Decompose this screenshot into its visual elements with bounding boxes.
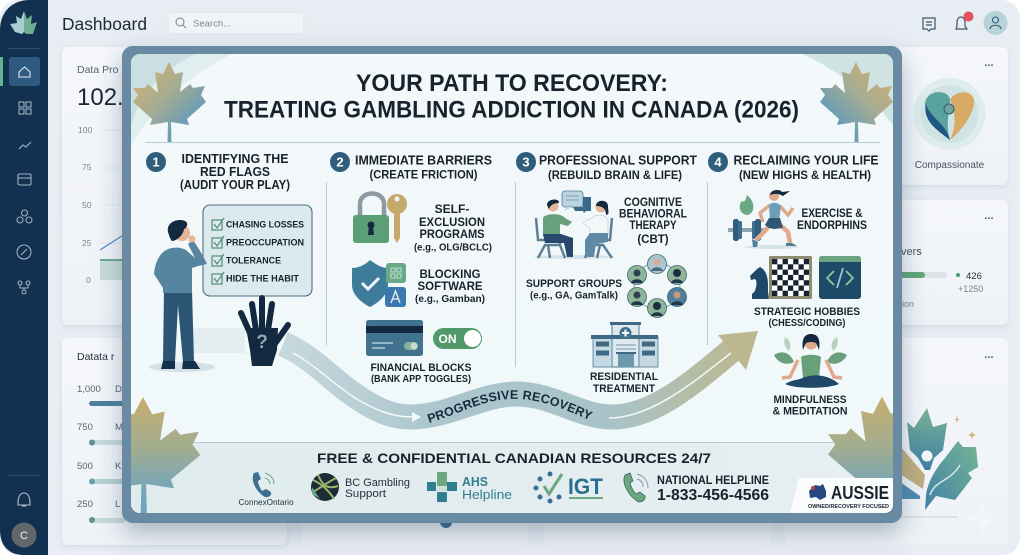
icon: Australia flag map (809, 484, 826, 500)
logo: BC Gambling Support: Support (345, 488, 386, 500)
text: cognitive behavioral therapy (619, 197, 687, 246)
decorative corners (131, 54, 893, 145)
card: compassionate: ... (984, 57, 994, 69)
text: exercise and endorphins: EXERCISE & (802, 208, 862, 220)
card: compassionate (780, 47, 1008, 185)
line under title (145, 142, 880, 143)
checklist panel: TOLERANCE (226, 256, 281, 266)
icon: chess knight (750, 267, 769, 299)
text: blocking software: BLOCKING (420, 267, 480, 281)
card: data rows: 500 (77, 461, 93, 472)
heading 4: (NEW HIGHS & HEALTH) (739, 168, 871, 182)
icon: message (923, 18, 935, 31)
text: self-exclusion programs: SELF- (435, 202, 469, 216)
badge: Aussie owned (790, 478, 893, 513)
step number 1 (146, 152, 166, 172)
text: exercise and endorphins: ENDORPHINS (797, 220, 867, 232)
card: data progress: 102. (77, 84, 124, 111)
text: cognitive behavioral therapy: THERAPY (630, 220, 677, 232)
icon: code window (819, 256, 861, 299)
heading 1: (AUDIT YOUR PLAY) (180, 178, 290, 192)
icon: chess board (769, 256, 812, 299)
text: mindfulness and meditation: & MEDITATION (772, 406, 848, 418)
icon: dark hand with question mark: ? (256, 332, 268, 353)
icon: flame (740, 195, 753, 215)
panel: step 3 professional support (516, 152, 697, 395)
illustration: therapy session (534, 191, 614, 259)
heading 1: IDENTIFYING THE (182, 152, 288, 166)
heading 3 (539, 154, 697, 182)
badge: Aussie owned: OWNED/RECOVERY FOCUSED (808, 504, 889, 510)
icon: dark hand with question mark (241, 298, 288, 366)
text: financial blocks: FINANCIAL BLOCKS (370, 362, 472, 374)
step number 2: 2 (336, 154, 344, 170)
heading 4: RECLAIMING YOUR LIFE (734, 154, 878, 168)
icon: bank card (366, 320, 423, 356)
icon: sidebar bell (18, 493, 30, 506)
heading 1 (180, 152, 290, 192)
sidebar (0, 0, 48, 555)
card: data rows: 750 (77, 422, 93, 433)
icon: notification bell (956, 12, 974, 29)
heading 4 (734, 154, 878, 182)
bottom dashboard cards: ... (984, 349, 994, 361)
text: cognitive behavioral therapy: BEHAVIORAL (619, 208, 687, 220)
logo: IGT (534, 472, 604, 504)
card: drivers: ion (902, 299, 914, 309)
text: support groups (526, 278, 622, 302)
text: self-exclusion programs: PROGRAMS (420, 227, 484, 241)
panel: step 2 immediate barriers (330, 152, 492, 385)
card: data rows: Datata r (77, 351, 115, 363)
heading 3: PROFESSIONAL SUPPORT (539, 154, 697, 168)
dashboard header (62, 11, 1008, 35)
step number 1: 1 (152, 154, 160, 170)
card: drivers (780, 200, 1008, 325)
text: strategic hobbies: (CHESS/CODING) (768, 318, 846, 329)
card: data rows (62, 338, 287, 545)
card: data progress: 0 (86, 275, 91, 285)
heading 1: RED FLAGS (200, 165, 270, 179)
heading 2: (CREATE FRICTION) (370, 168, 478, 182)
text: support groups: (e.g., GA, GamTalk) (530, 290, 618, 302)
card: drivers: +1250 (958, 284, 983, 294)
card: data rows: K (115, 461, 122, 472)
logo: national helpline (624, 473, 769, 504)
icon: user avatar (984, 11, 1008, 35)
card: data progress: Data Pro (77, 64, 119, 76)
card: data rows: 1,000 (77, 384, 101, 395)
ribbon label: PROGRESSIVE RECOVERY (427, 390, 593, 423)
text: residential treatment (590, 371, 658, 395)
icon: support group circle (628, 254, 686, 318)
logo: AHS Helpline: AHS (462, 475, 488, 489)
bottom dashboard cards (302, 338, 1008, 545)
leaf: bottom left (131, 397, 200, 513)
user initial avatar (12, 522, 36, 548)
leaf: top right (820, 62, 893, 142)
card: drivers: 426 (966, 271, 982, 282)
step number 3: 3 (522, 154, 530, 170)
logo: IGT: IGT (568, 474, 604, 499)
text: mindfulness and meditation: MINDFULNESS (774, 394, 846, 406)
text: blocking software: SOFTWARE (418, 279, 482, 293)
card: data rows: M (115, 422, 123, 433)
card: data rows: 250 (77, 499, 93, 510)
text: strategic hobbies: STRATEGIC HOBBIES (754, 306, 860, 318)
title: TREATING GAMBLING ADDICTION IN CANADA (2026) (224, 96, 799, 124)
step number 3 (516, 152, 536, 172)
card: drivers: vers (901, 246, 922, 258)
illustration: meditating person (774, 334, 847, 388)
icon: dumbbell (728, 219, 764, 241)
text: financial blocks (370, 362, 472, 385)
active nav item: home (0, 57, 40, 86)
search box (168, 12, 304, 34)
badge: Aussie owned: AUSSIE (831, 483, 889, 503)
icon: ON toggle (433, 328, 482, 349)
step number 4: 4 (714, 154, 722, 170)
text: self-exclusion programs: EXCLUSION (419, 215, 485, 229)
illustration: runner (745, 190, 799, 249)
text: mindfulness and meditation (772, 394, 848, 418)
card: data progress (62, 47, 392, 325)
checklist panel: HIDE THE HABIT (226, 274, 299, 284)
card: data progress: 100 (78, 125, 92, 135)
user initial avatar: C (20, 530, 28, 542)
footer heading: FREE & CONFIDENTIAL CANADIAN RESOURCES 24/7 (317, 450, 711, 466)
card: data rows: L (115, 499, 120, 510)
icon: dashboard leaf figure (900, 408, 999, 535)
checklist panel (203, 205, 312, 296)
icon: padlock and key (353, 194, 407, 243)
heading: Dashboard: Dashboard (62, 14, 147, 34)
text: cognitive behavioral therapy: (CBT) (637, 234, 669, 246)
light band behind figure (191, 328, 245, 353)
leaf: bottom right (828, 396, 893, 478)
text: financial blocks: (BANK APP TOGGLES) (371, 374, 471, 385)
card: data progress: 25 (82, 238, 92, 248)
divider 3-4 (707, 182, 708, 345)
checklist panel: CHASING LOSSES (226, 220, 304, 230)
icon: hospital (591, 322, 658, 367)
heading 3: (REBUILD BRAIN & LIFE) (548, 168, 682, 182)
text: exercise and endorphins (797, 208, 867, 232)
text: self-exclusion programs: (e.g., OLG/BCLC) (414, 242, 492, 254)
logo: AHS Helpline: Helpline (462, 487, 512, 502)
illustration: thinking person (149, 220, 215, 372)
text: blocking software (415, 267, 485, 305)
logo: maple leaf (10, 11, 37, 34)
icon: shield and apps (352, 260, 406, 307)
title: YOUR PATH TO RECOVERY: (356, 70, 668, 97)
footer band: resources (131, 396, 893, 513)
step number 4 (708, 152, 728, 172)
text: cognitive behavioral therapy: COGNITIVE (624, 197, 682, 209)
icon: ON toggle: ON (438, 332, 456, 346)
text: residential treatment: TREATMENT (593, 383, 655, 395)
logo: AHS Helpline (427, 472, 512, 502)
text: support groups: SUPPORT GROUPS (526, 278, 622, 290)
card: data progress: 75 (82, 162, 92, 172)
leaf: top left (133, 62, 206, 142)
card: drivers: ... (984, 210, 994, 222)
logo: ConnexOntario: ConnexOntario (238, 497, 294, 507)
divider 1-2 (326, 182, 327, 345)
card: compassionate: Compassionate (915, 160, 985, 171)
text: residential treatment: RESIDENTIAL (590, 371, 658, 383)
panel: step 1 identifying the red flags (146, 152, 312, 372)
search box: Search... (193, 18, 231, 30)
text: blocking software: (e.g., Gamban) (415, 294, 485, 305)
infographic frame (122, 46, 902, 523)
text: self-exclusion programs (414, 202, 492, 254)
card: data progress: 50 (82, 200, 92, 210)
logo: national helpline: 1-833-456-4566 (657, 487, 769, 504)
logo: national helpline: NATIONAL HELPLINE (657, 473, 769, 487)
progressive recovery arrow (278, 331, 758, 430)
icon: heart (925, 92, 974, 140)
heading 2 (355, 154, 492, 182)
checklist panel: PREOCCUPATION (226, 238, 304, 248)
logo: BC Gambling Support (311, 473, 410, 501)
step number 2 (330, 152, 350, 172)
nav icons (17, 102, 32, 294)
title (224, 70, 799, 124)
logo: ConnexOntario (238, 472, 294, 507)
panel: step 4 reclaiming your life (708, 152, 878, 418)
logo: BC Gambling Support: BC Gambling (345, 477, 410, 489)
divider 2-3 (515, 182, 516, 367)
card: data rows: D (115, 384, 122, 395)
heading 2: IMMEDIATE BARRIERS (355, 154, 492, 168)
text: strategic hobbies (754, 306, 860, 329)
